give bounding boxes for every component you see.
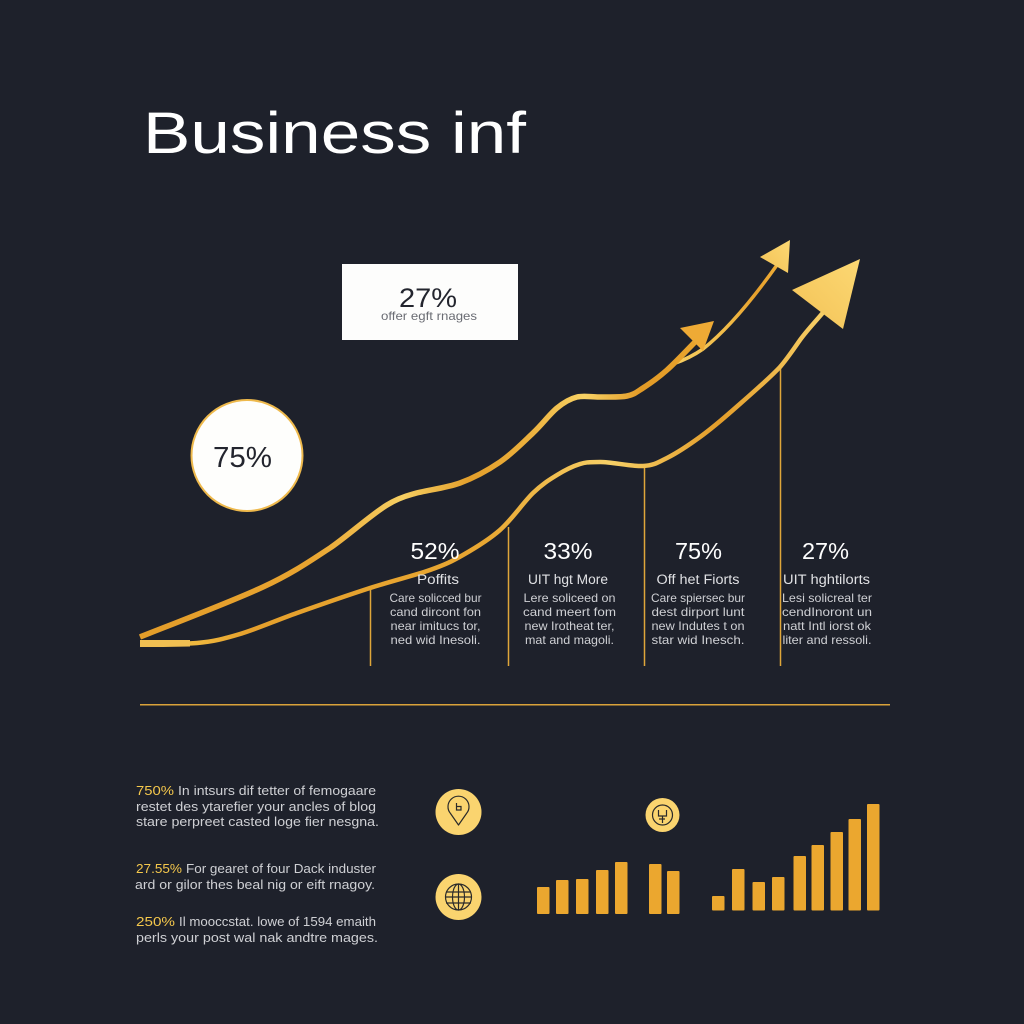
text block: 750%: restet des ytarefier your ancles of blog	[136, 800, 376, 814]
chart: lower growth curve with arrow	[140, 259, 860, 647]
text block: 27.55%: ard or gilor thes beal nig or eift rnagoy.	[135, 878, 375, 892]
column: 27% UIT hghtilorts: liter and ressoli.	[782, 633, 872, 647]
column: 27% UIT hghtilorts: UIT hghtilorts	[783, 572, 870, 587]
column: 27% UIT hghtilorts: 27%	[802, 538, 849, 564]
callout: 75% circle	[192, 400, 302, 511]
column: 33% UIT hgt More: cand meert fom	[523, 605, 616, 619]
column: 52% Poffits: cand dircont fon	[390, 605, 481, 619]
text block: 250%	[136, 915, 378, 945]
icon: globe	[436, 874, 482, 920]
arrowhead: top small	[760, 240, 790, 273]
column: 75% Off het Fiorts: Off het Fiorts	[656, 572, 740, 587]
column: 75% Off het Fiorts	[651, 538, 745, 647]
title: Business inf	[143, 101, 527, 166]
text block: 750%: stare perpreet casted loge fier nesgna.	[136, 815, 379, 829]
column: 52% Poffits: ned wid Inesoli.	[390, 633, 480, 647]
text block: 750%	[136, 784, 379, 829]
column: 27% UIT hghtilorts: natt Intl iorst ok	[783, 619, 872, 633]
column: 33% UIT hgt More	[523, 538, 616, 647]
arrowhead: middle	[680, 321, 714, 351]
vertical column dividers	[370, 368, 780, 666]
column: 75% Off het Fiorts: star wid Inesch.	[652, 633, 744, 647]
column: 52% Poffits: Poffits	[417, 572, 459, 587]
column: 33% UIT hgt More: 33%	[544, 538, 593, 564]
column: 52% Poffits: Care solicced bur	[390, 591, 482, 605]
column: 27% UIT hghtilorts: cendInoront un	[782, 605, 872, 619]
text block: 250%: 250%	[136, 915, 175, 929]
icon: coin badge	[646, 798, 680, 832]
text block: 27.55%: For gearet of four Dack induster	[186, 862, 376, 876]
column: 27% UIT hghtilorts	[782, 538, 872, 647]
bar chart: small	[537, 862, 680, 914]
column: 33% UIT hgt More: UIT hgt More	[528, 572, 608, 587]
callout: 75% circle: 75%	[213, 442, 272, 474]
text block: 27.55%	[135, 862, 376, 892]
text block: 27.55%: 27.55%	[136, 862, 182, 876]
text block: 750%: In intsurs dif tetter of femogaare	[178, 784, 376, 798]
callout: 27% white box: 27%	[399, 283, 457, 313]
column: 33% UIT hgt More: Lere soliceed on	[524, 591, 616, 605]
text block: 250%: Il mooccstat. lowe of 1594 emaith	[179, 915, 376, 929]
bar chart: rising	[712, 804, 880, 910]
chart: upper growth curve with arrows	[140, 240, 790, 637]
callout: 27% white box: offer egft rnages	[381, 309, 477, 323]
column: 52% Poffits: near imitucs tor,	[390, 619, 480, 633]
text block: 750%: 750%	[136, 784, 174, 798]
column: 75% Off het Fiorts: new Indutes t on	[652, 619, 744, 633]
column: 75% Off het Fiorts: 75%	[675, 538, 722, 564]
column: 27% UIT hghtilorts: Lesi solicreal ter	[782, 591, 872, 605]
callout: 27% white box	[342, 264, 518, 340]
column: 52% Poffits: 52%	[410, 538, 460, 564]
column: 75% Off het Fiorts: dest dirport lunt	[652, 605, 745, 619]
column: 33% UIT hgt More: mat and magoli.	[525, 633, 614, 647]
icon: location pin	[436, 789, 482, 835]
arrowhead: large	[792, 259, 860, 329]
column: 52% Poffits	[390, 538, 482, 647]
column: 33% UIT hgt More: new Irotheat ter,	[524, 619, 614, 633]
section divider line	[140, 704, 890, 706]
column: 75% Off het Fiorts: Care spiersec bur	[651, 591, 745, 605]
text block: 250%: perls your post wal nak andtre mages.	[136, 931, 378, 945]
